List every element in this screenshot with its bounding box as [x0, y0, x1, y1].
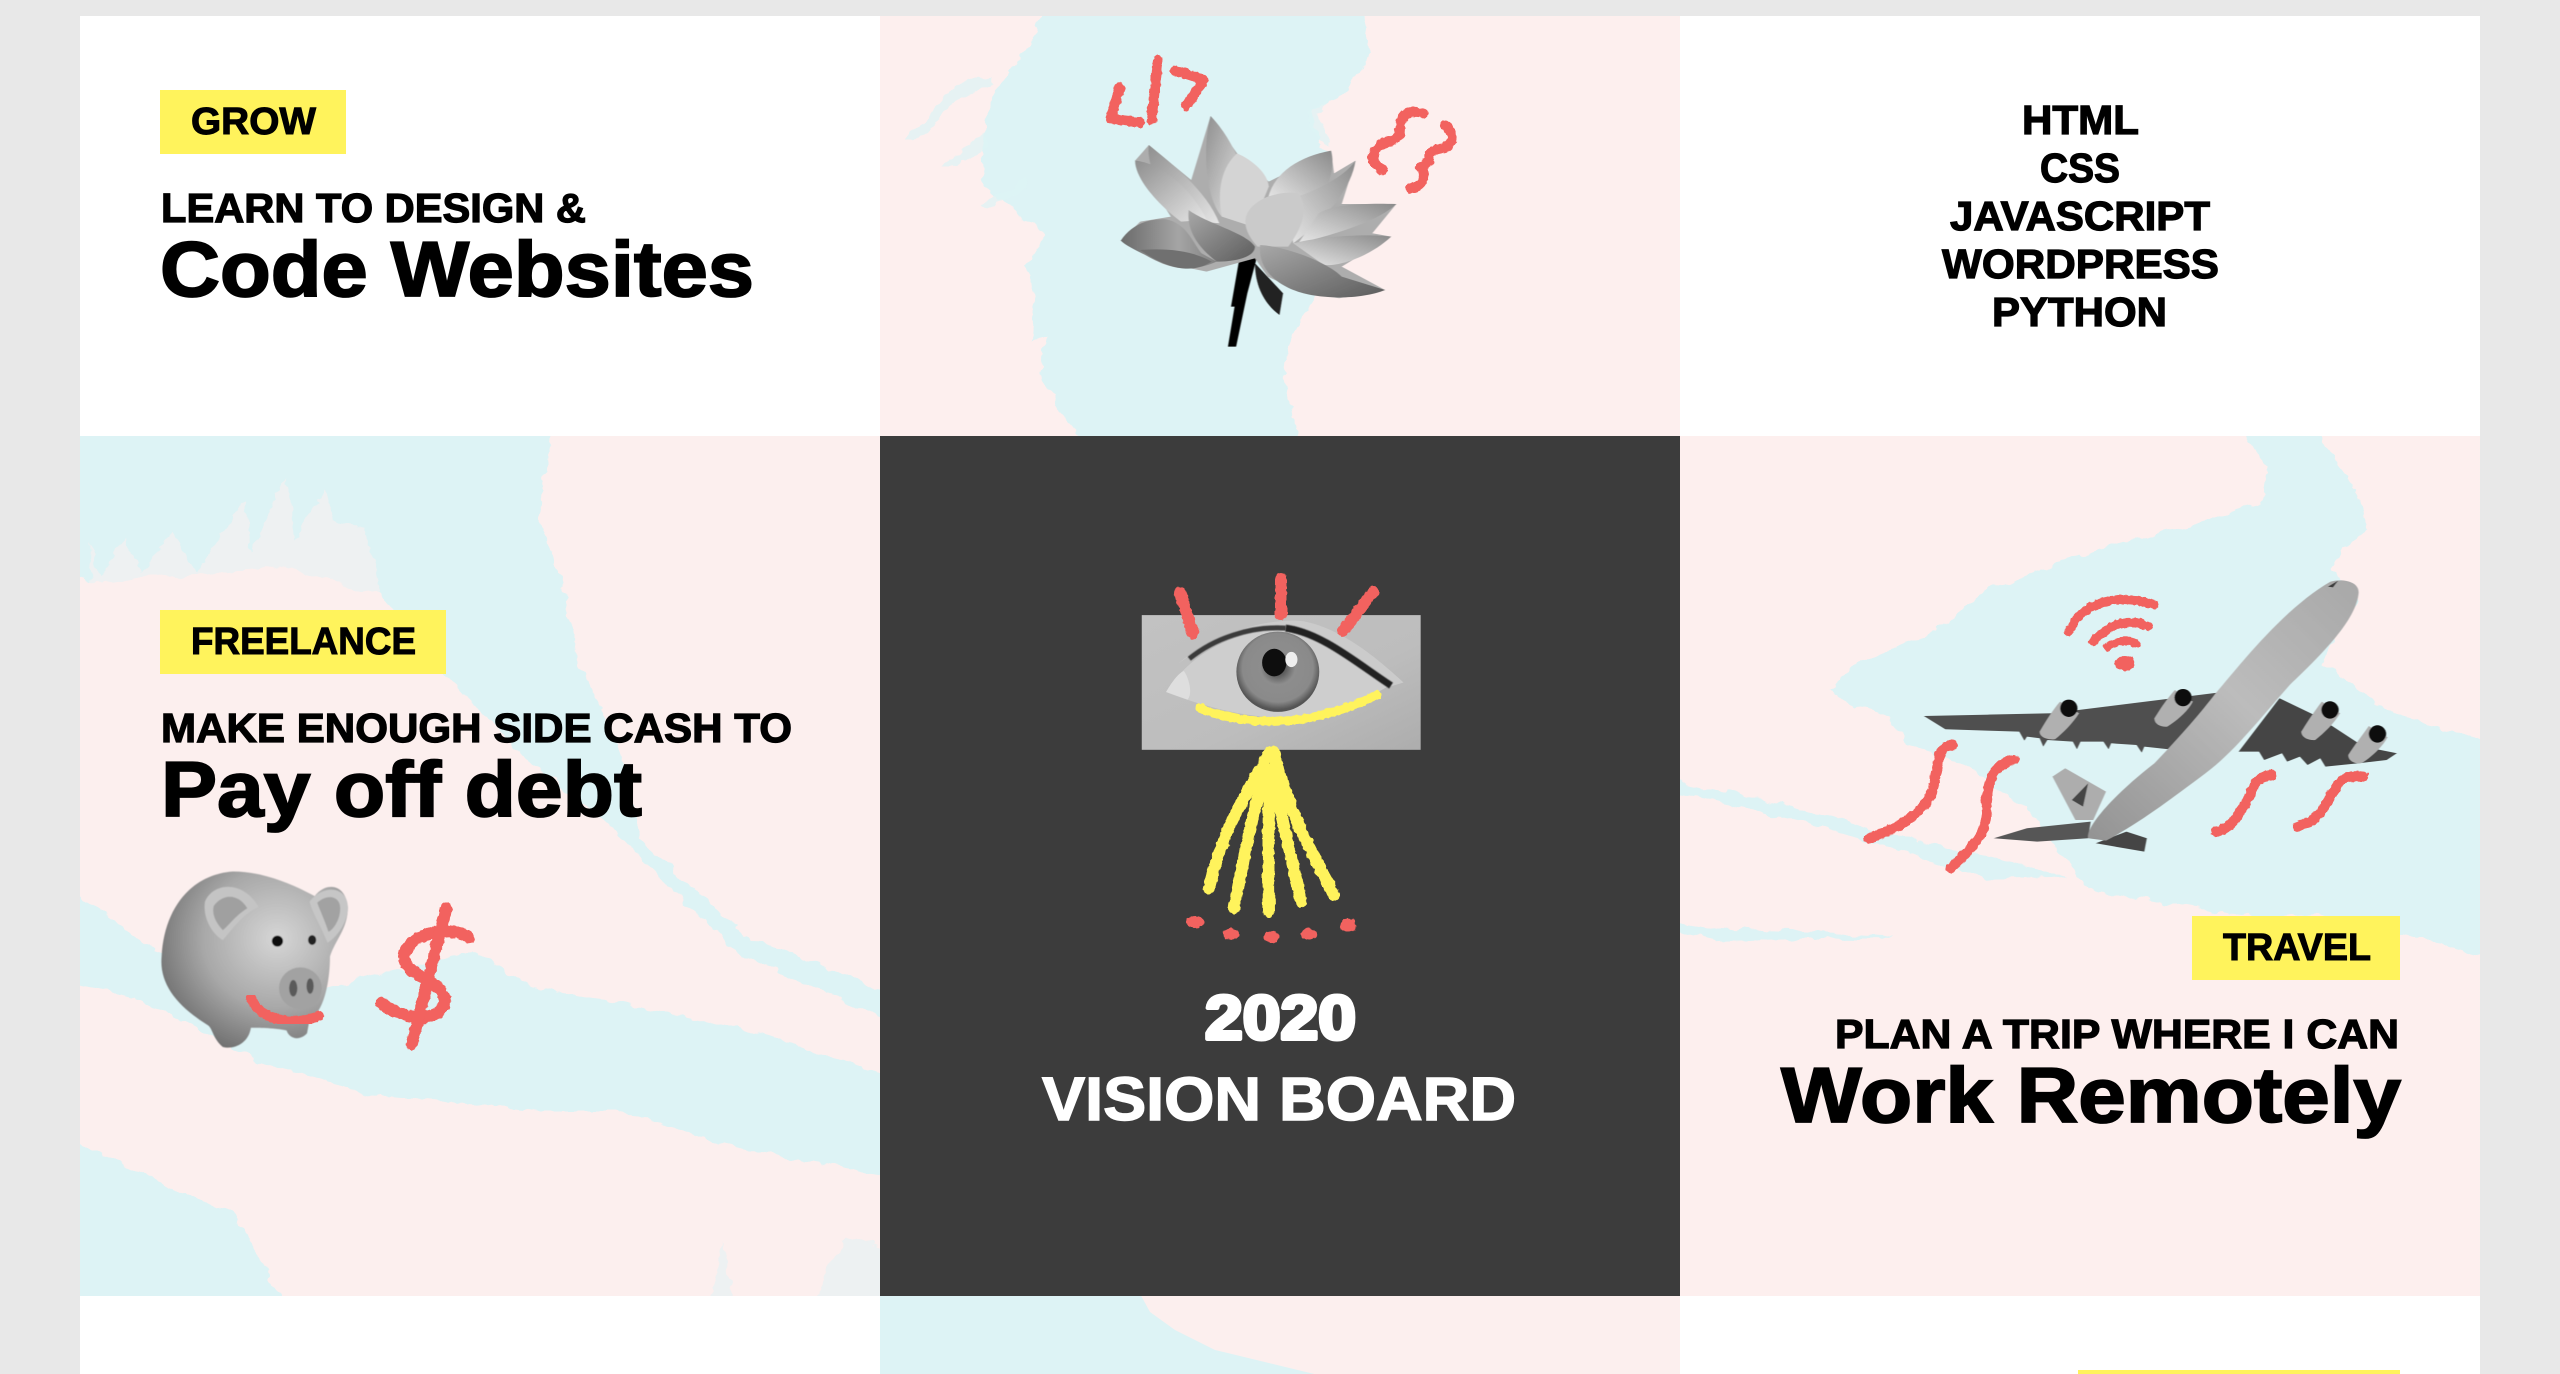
- subheading: side cash: MAKE ENOUGH SIDE CASH TO: [161, 705, 792, 751]
- icon: eye rays and beams doodle: [1180, 579, 1377, 943]
- panel: travel: [1665, 423, 2507, 1296]
- icon: dollar sign doodle: [381, 908, 469, 1044]
- panel: lotus: [880, 0, 1680, 450]
- tag: freelance: [160, 610, 446, 674]
- panel: bottom right: [1680, 1296, 2480, 1374]
- panel: freelance: [80, 436, 880, 1296]
- text: skills: PYTHON: [1992, 289, 2167, 335]
- tag: grow: [160, 90, 346, 154]
- panel: skills list: [1680, 16, 2480, 436]
- tag: travel: TRAVEL: [2223, 927, 2371, 969]
- icon: code brackets doodle: [1111, 60, 1452, 188]
- text: skills: JAVASCRIPT: [1950, 193, 2210, 239]
- panel: grow heading: [80, 16, 880, 436]
- panel: bottom middle: [870, 1290, 1680, 1374]
- brush background: [906, 0, 1372, 450]
- icon: wifi and wind doodles: [1869, 600, 2364, 868]
- title: vision board: VISION BOARD: [1042, 1065, 1516, 1133]
- tag: grow: GROW: [191, 101, 316, 143]
- text: skills: CSS: [2040, 145, 2120, 191]
- icon: piggy bank: [161, 871, 348, 1048]
- brush background: [80, 436, 880, 1296]
- tag: freelance: FREELANCE: [191, 621, 416, 663]
- icon: lotus flower: [1121, 116, 1396, 347]
- icon: airplane: [1924, 580, 2397, 852]
- text: skills: [1942, 97, 2219, 335]
- text: skills: WORDPRESS: [1942, 241, 2219, 287]
- text: skills: HTML: [2022, 97, 2139, 143]
- heading: work remotely: Work Remotely: [1781, 1051, 2401, 1139]
- panel: vision board center: [880, 436, 1680, 1296]
- heading: code websites: Code Websites: [160, 225, 754, 313]
- icon: eye: [1142, 615, 1421, 750]
- brush background: [880, 1296, 1314, 1374]
- subheading: learn to design: LEARN TO DESIGN &: [161, 185, 586, 231]
- title: 2020: 2020: [1205, 984, 1356, 1053]
- tag: partially visible: [2078, 1370, 2400, 1374]
- panel: bottom left: [80, 1296, 880, 1374]
- tag: travel: [2192, 916, 2400, 980]
- subheading: plan a trip: PLAN A TRIP WHERE I CAN: [1835, 1011, 2399, 1057]
- heading: pay off debt: Pay off debt: [161, 745, 642, 833]
- brush background: [1665, 423, 2507, 960]
